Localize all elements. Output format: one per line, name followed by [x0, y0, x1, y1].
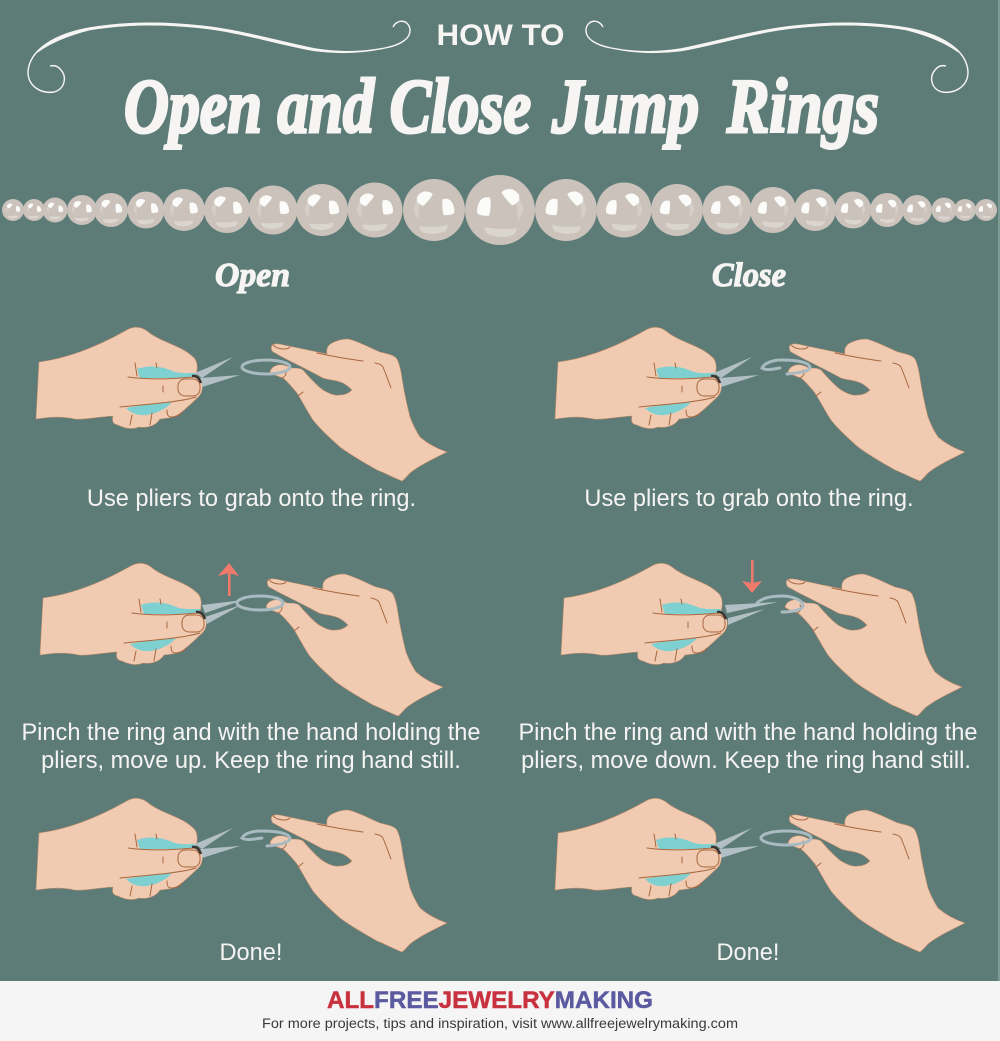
title: Jump — [551, 63, 699, 149]
heading: close: Close — [712, 257, 786, 294]
illustration: open step 3 — [36, 798, 447, 952]
caption: close step 2: pliers, move down. Keep the ring hand still. — [521, 748, 971, 774]
title: Open and Close — [124, 63, 531, 149]
illustration: open step 2 — [40, 563, 443, 716]
footer — [0, 981, 1000, 1041]
caption: close step 3: Done! — [717, 940, 779, 966]
heading: open: Open — [215, 257, 290, 294]
flourish: right swirl — [586, 21, 968, 92]
subtitle: how to: HOW TO — [436, 19, 564, 52]
illustration: open step 1 — [36, 327, 447, 481]
arrow: down — [742, 560, 762, 593]
caption: open step 1: Use pliers to grab onto the ring. — [87, 486, 416, 512]
caption: close step 1: Use pliers to grab onto the ring. — [584, 486, 914, 512]
illustration: close step 2 — [561, 563, 962, 716]
flourish: left swirl — [28, 21, 410, 92]
footer tagline: For more projects, tips and inspiration, visit www.allfreejewelrymaking.com — [262, 1016, 738, 1031]
caption: open step 3: Done! — [220, 940, 282, 966]
title — [124, 63, 879, 149]
pearl necklace divider — [2, 175, 997, 245]
title: Rings — [726, 63, 879, 149]
illustration: close step 3 — [555, 798, 965, 952]
footer logo: ALLFREEJEWELRYMAKING — [327, 987, 653, 1014]
caption: open step 2: Pinch the ring and with the hand holding the — [21, 720, 481, 746]
arrow: up — [218, 563, 239, 596]
caption: close step 2: Pinch the ring and with the hand holding the — [518, 720, 978, 746]
caption: open step 2: pliers, move up. Keep the ring hand still. — [41, 748, 461, 774]
illustration: close step 1 — [555, 327, 965, 481]
